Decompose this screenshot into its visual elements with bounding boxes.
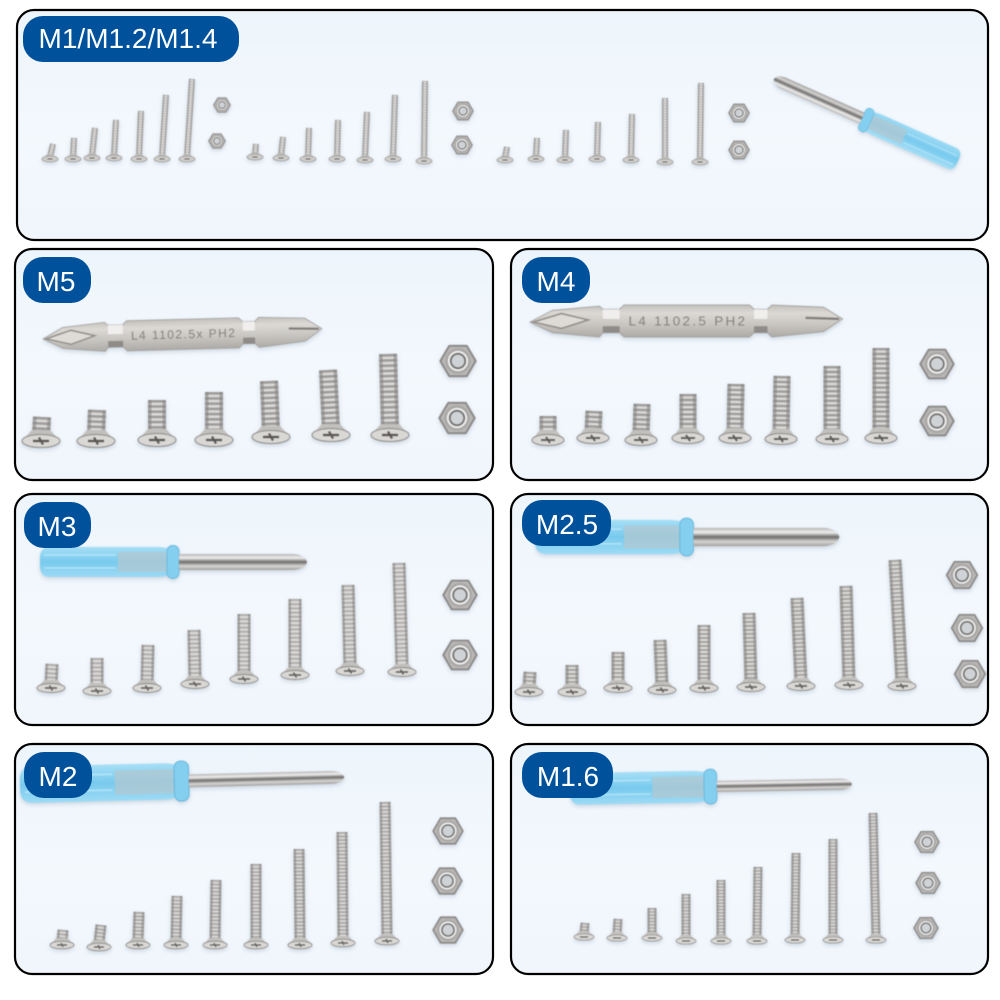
heading: M1.6: M1.6: [537, 761, 599, 792]
screw: M1 set 4: [106, 120, 122, 161]
screw 5: [203, 880, 227, 949]
screw 1: [532, 416, 564, 446]
nut: top: [433, 818, 463, 844]
screw 2: [83, 658, 111, 696]
panel: M1/M1.2/M1.4: [17, 10, 988, 240]
screw 9: [888, 560, 916, 690]
screw: M1.4 set 7: [692, 83, 708, 165]
screw 5: [690, 625, 718, 692]
nut: M1.4 top: [729, 104, 749, 122]
nut: bottom: [914, 918, 938, 938]
screw 7: [288, 849, 312, 949]
nut: M1 bottom: [209, 134, 225, 148]
panel: M4: [511, 249, 988, 480]
screw: M1.2 set 5: [357, 112, 373, 163]
screw 6: [281, 599, 309, 680]
screw 2: [77, 410, 115, 448]
screw: M1.2 set 1: [247, 144, 263, 160]
screw 4: [195, 392, 233, 446]
screw: M1.2 set 2: [273, 137, 289, 161]
screw 8: [331, 832, 355, 947]
screw: M1.2 set 6: [385, 95, 401, 162]
screw: M1.2 set 4: [329, 120, 345, 162]
nut: top: [440, 346, 476, 376]
nut: M1.4 bottom: [729, 141, 749, 159]
nut: bottom: [955, 661, 985, 687]
screw 4: [164, 896, 188, 949]
nut: middle: [952, 615, 982, 641]
screw 6: [765, 376, 797, 444]
nut: M1.2 top: [453, 102, 473, 120]
screw 2: [577, 411, 609, 444]
nut: bottom: [439, 403, 475, 433]
screw 2: [607, 919, 627, 941]
screw 6: [737, 613, 765, 692]
screw 8: [823, 839, 843, 943]
screw 5: [230, 614, 258, 684]
screw: M1 set 5: [131, 111, 147, 162]
screw 7: [371, 354, 409, 442]
heading: M3: [24, 502, 91, 548]
screw 3: [138, 400, 176, 446]
nut: top: [947, 562, 977, 588]
screw: M1.4 set 3: [557, 130, 573, 163]
screw 8: [388, 563, 416, 676]
screw: M1 set 7: [179, 79, 195, 162]
nut: top: [920, 350, 954, 378]
icon: screwdriver: [20, 757, 345, 805]
screw: M1 set 2: [65, 138, 81, 162]
screw: M1.4 set 1: [497, 147, 513, 163]
screw 6: [747, 867, 767, 944]
screw 7: [787, 598, 815, 690]
icon: double-ended bit: [530, 305, 842, 337]
screw 5: [252, 381, 290, 444]
panel: M3: [15, 494, 493, 725]
screw 4: [676, 894, 696, 944]
icon: double-ended bit: L4 1102.5 PH2: [629, 314, 745, 328]
icon: screwdriver: [570, 767, 852, 806]
heading: M4: [522, 257, 590, 303]
heading: M3: M3: [38, 511, 76, 542]
panel: M5: [15, 249, 493, 480]
screw 3: [604, 652, 632, 692]
panel: M2: [15, 744, 493, 974]
icon: double-ended bit: L4 1102.5x PH2: [131, 326, 235, 343]
nut: bottom: [920, 407, 954, 435]
screw 2: [87, 925, 111, 951]
icon: screwdriver: [40, 546, 307, 578]
heading: M1/M1.2/M1.4: M1/M1.2/M1.4: [39, 23, 217, 54]
nut: top: [915, 832, 939, 852]
heading: M2: M2: [39, 761, 77, 792]
screw 4: [672, 394, 704, 444]
panel: M2.5: [511, 494, 988, 725]
screw 7: [816, 366, 848, 444]
screw: M1 set 3: [84, 128, 100, 161]
nut: M1.2 bottom: [452, 136, 472, 154]
nut: top: [443, 581, 477, 609]
heading: M2.5: M2.5: [536, 509, 598, 540]
panel: M1.6: [511, 744, 988, 974]
screw 1: [37, 664, 65, 692]
heading: M5: [23, 257, 91, 303]
icon: screwdriver: [535, 518, 839, 556]
nut: bottom: [433, 917, 463, 943]
screw: M1.4 set 6: [657, 98, 673, 165]
screw: M1 set 6: [154, 95, 170, 162]
screw: M1.4 set 5: [623, 114, 639, 163]
screw: M1.4 set 2: [528, 138, 544, 162]
screw 3: [625, 404, 657, 446]
screw 6: [244, 864, 268, 949]
nut: M1 top: [214, 98, 230, 112]
screw 8: [865, 348, 897, 444]
icon: double-ended bit: [43, 316, 322, 353]
screw 2: [558, 665, 586, 696]
screw 5: [719, 384, 751, 444]
heading: M4: M4: [537, 266, 575, 297]
screw 3: [126, 912, 150, 949]
screw 6: [312, 370, 350, 442]
screw 3: [642, 908, 662, 941]
screw 5: [711, 880, 731, 944]
screw 9: [375, 802, 399, 945]
screw: M1.4 set 4: [589, 122, 605, 162]
screw: M1.2 set 7: [416, 81, 432, 164]
screw: M1.2 set 3: [300, 128, 316, 162]
screw 8: [835, 586, 863, 690]
heading: M1/M1.2/M1.4: [23, 16, 239, 62]
screw 4: [181, 630, 209, 688]
heading: M2.5: [522, 500, 611, 546]
icon: screwdriver: [769, 68, 963, 172]
screw 4: [648, 640, 676, 694]
nut: bottom: [443, 641, 477, 669]
heading: M1.6: [522, 752, 613, 798]
screw 9: [866, 813, 886, 943]
screw: M1 set 1: [42, 144, 58, 162]
screw 7: [785, 853, 805, 943]
screw 3: [133, 645, 161, 692]
heading: M5: M5: [37, 266, 75, 297]
screw 7: [336, 585, 364, 676]
heading: M2: [24, 752, 92, 798]
screw 1: [515, 672, 543, 696]
nut: middle: [432, 868, 462, 894]
nut: middle: [916, 873, 940, 893]
screw 1: [22, 417, 60, 448]
screw 1: [50, 930, 74, 949]
screw 1: [574, 923, 594, 940]
